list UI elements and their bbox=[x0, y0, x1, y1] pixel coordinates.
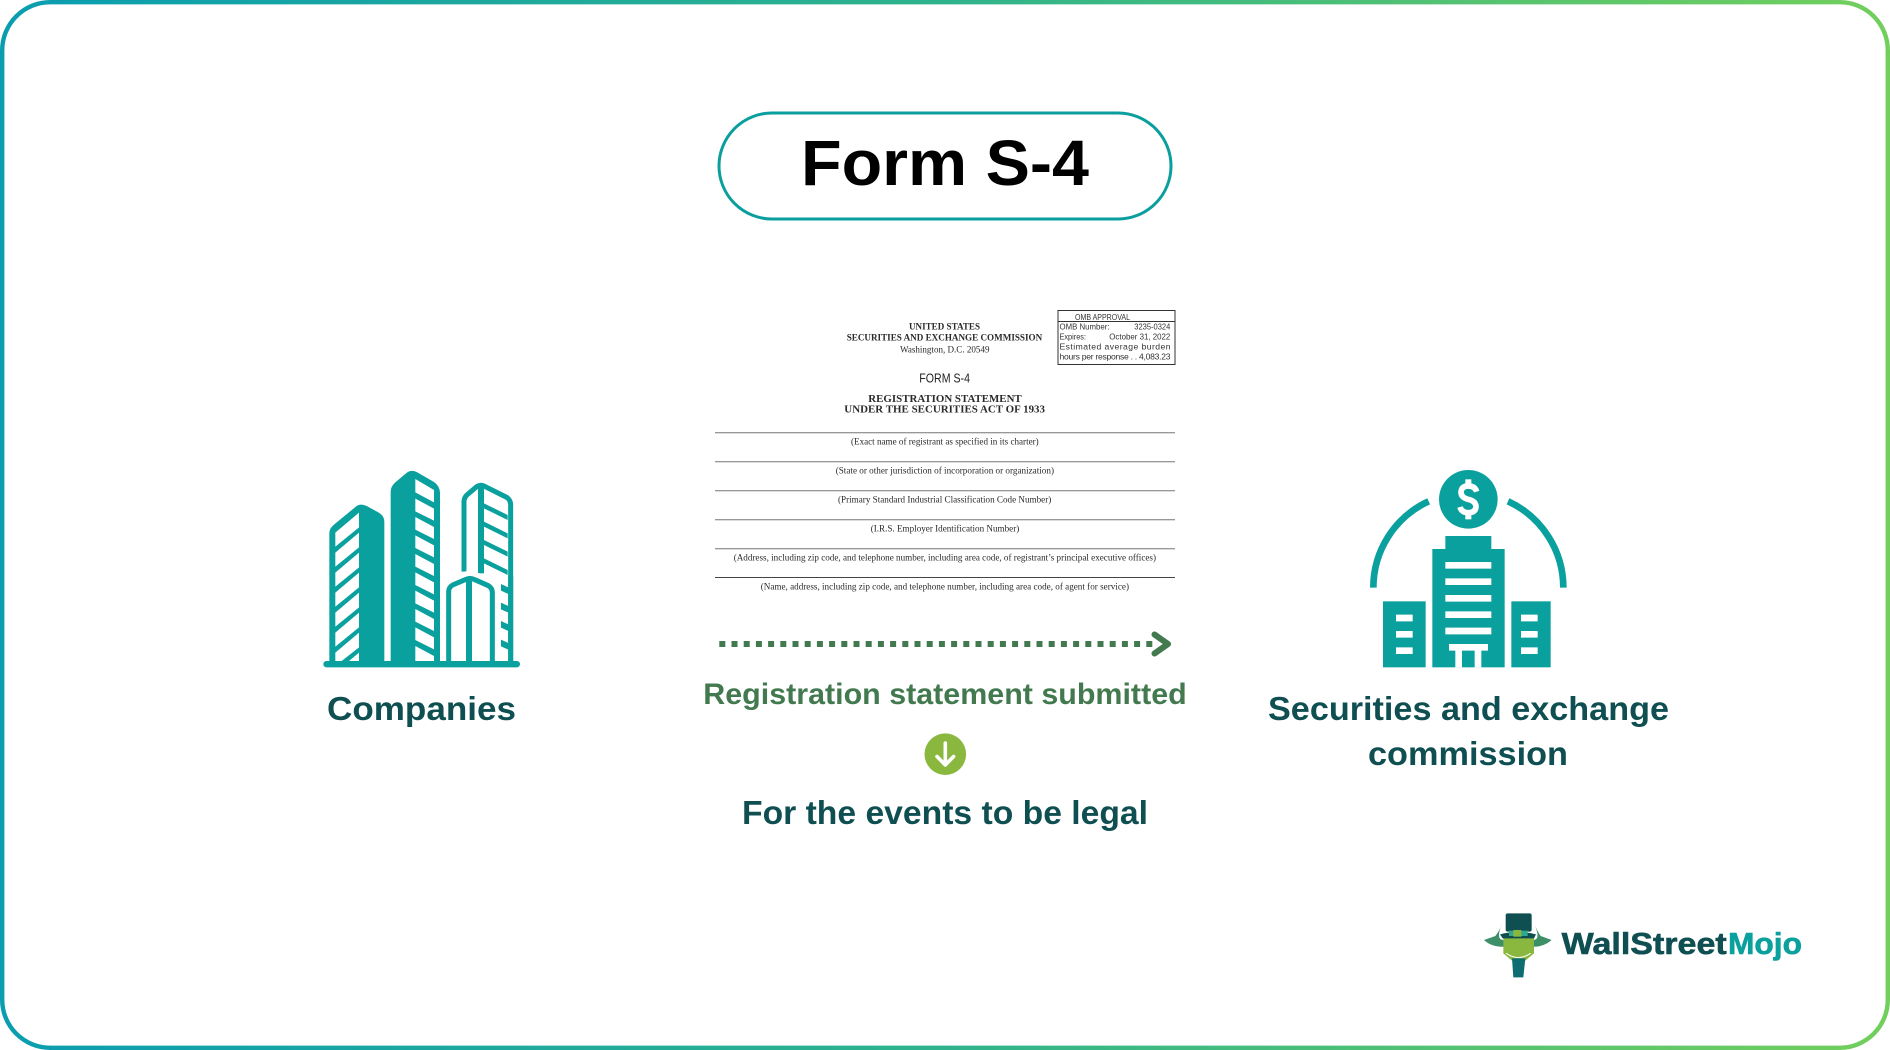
icon: companies buildings bbox=[323, 471, 520, 667]
label: securities and exchange commission: commission bbox=[1368, 735, 1568, 772]
form fields: (Address, including zip code, and telephone number, including area code, of registrant’s principal executive offices) bbox=[734, 552, 1156, 563]
wordmark: Mojo bbox=[1728, 926, 1802, 961]
SEC letterhead: SECURITIES AND EXCHANGE COMMISSION bbox=[847, 334, 1042, 344]
icon: bull with top hat bbox=[1484, 913, 1552, 977]
form fields: (Primary Standard Industrial Classification Code Number) bbox=[838, 494, 1051, 505]
icon: green down arrow bbox=[924, 733, 966, 775]
logo: WallStreetMojo bbox=[1484, 913, 1802, 977]
label: for the events to be legal: For the events to be legal bbox=[742, 794, 1148, 831]
icon: SEC building with dollar coin bbox=[1373, 470, 1563, 667]
form fields: (Exact name of registrant as specified in its charter) bbox=[851, 436, 1039, 447]
OMB approval box: OMB APPROVAL bbox=[1075, 312, 1130, 322]
wordmark bbox=[1562, 926, 1802, 961]
form fields bbox=[715, 433, 1175, 592]
OMB approval box: 3235-0324 bbox=[1134, 322, 1170, 332]
SEC letterhead: Washington, D.C. 20549 bbox=[900, 346, 990, 356]
SEC letterhead: UNITED STATES bbox=[909, 322, 980, 332]
label: registration statement submitted: Registration statement submitted bbox=[703, 678, 1187, 711]
title pill bbox=[719, 113, 1171, 219]
OMB approval box: Expires: bbox=[1060, 332, 1086, 342]
registration statement heading: REGISTRATION STATEMENT bbox=[868, 393, 1023, 405]
OMB approval box: Estimated average burden bbox=[1060, 341, 1171, 351]
OMB approval box: hours per response . . 4,083.23 bbox=[1060, 351, 1171, 361]
SEC letterhead bbox=[847, 322, 1042, 356]
OMB approval box: October 31, 2022 bbox=[1109, 332, 1170, 342]
form fields: (Name, address, including zip code, and telephone number, including area code, of agent for service) bbox=[761, 581, 1129, 592]
form fields: (I.R.S. Employer Identification Number) bbox=[871, 523, 1019, 534]
label: securities and exchange commission bbox=[1268, 690, 1669, 772]
OMB approval box bbox=[1058, 310, 1175, 364]
label: securities and exchange commission: Securities and exchange bbox=[1268, 690, 1669, 727]
registration statement heading bbox=[844, 393, 1046, 415]
arrow: dotted right arrow bbox=[719, 634, 1168, 654]
form fields: (State or other jurisdiction of incorporation or organization) bbox=[836, 465, 1054, 476]
wordmark: WallStreet bbox=[1562, 926, 1727, 961]
OMB approval box: OMB Number: bbox=[1060, 322, 1110, 332]
form document bbox=[715, 310, 1175, 592]
label: companies: Companies bbox=[327, 690, 516, 727]
title pill: Form S-4 bbox=[801, 127, 1089, 199]
form heading: FORM S-4 bbox=[919, 372, 970, 386]
registration statement heading: UNDER THE SECURITIES ACT OF 1933 bbox=[844, 403, 1046, 415]
